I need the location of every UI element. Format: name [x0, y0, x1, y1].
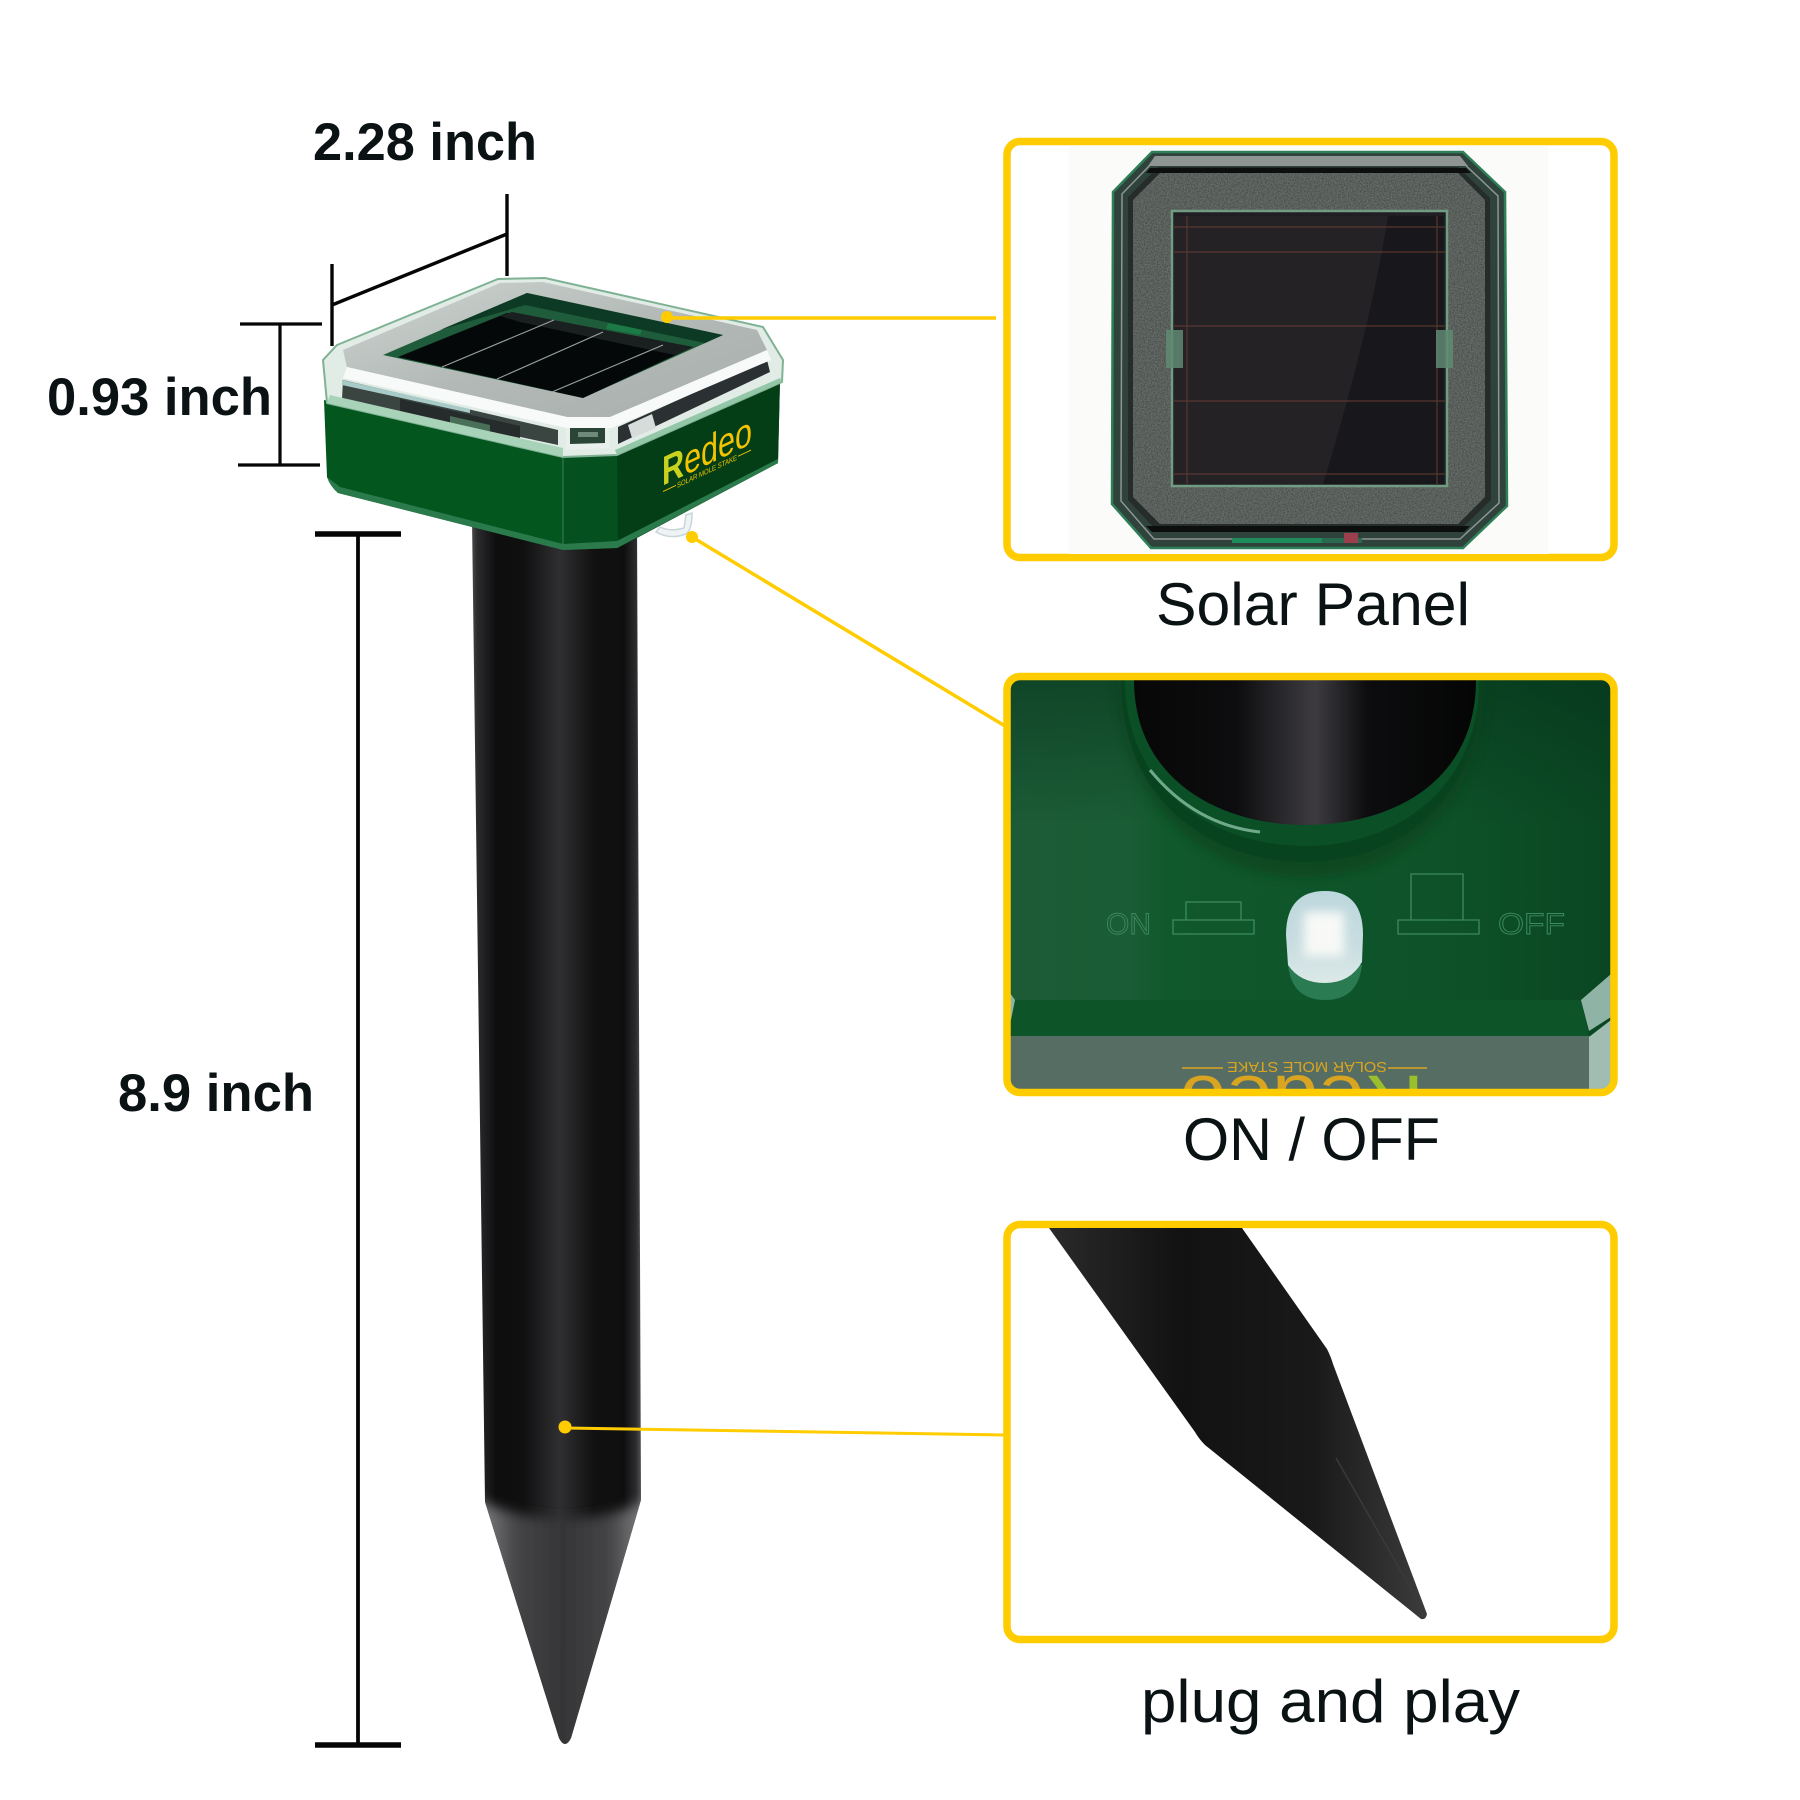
stake tip close-up	[1049, 1228, 1427, 1619]
right glass side	[618, 360, 770, 444]
front glass side	[342, 380, 558, 445]
solar panel photo	[1112, 152, 1507, 548]
shelf	[1010, 1000, 1589, 1036]
dimension: height 0.93 inch	[47, 324, 322, 465]
panel: solar panel	[1007, 142, 1614, 558]
logo: SOLAR MOLE STAKE	[677, 453, 737, 490]
logo	[662, 408, 752, 497]
dimension: length 8.9 inch: 8.9 inch	[118, 1064, 314, 1123]
dimension: length 8.9 inch	[118, 534, 401, 1745]
embossed on label: ON	[1106, 908, 1151, 941]
upside-down logo: SOLAR MOLE STAKE	[1227, 1058, 1387, 1075]
clear cover	[323, 278, 783, 457]
foam surround	[1133, 173, 1485, 524]
switch nub under head	[656, 513, 692, 537]
caption: plug and play: plug and play	[1141, 1668, 1520, 1735]
upside-down logo	[1182, 1062, 1427, 1089]
embossed off label: OFF	[1498, 908, 1565, 941]
top face	[343, 282, 767, 417]
upside-down logo: Redeo	[1180, 1060, 1424, 1140]
stake collar	[1118, 680, 1484, 878]
panel: plug and play	[1007, 1224, 1614, 1640]
stake body	[472, 527, 641, 1744]
green base	[1010, 680, 1610, 1036]
corner highlights	[1581, 974, 1611, 1031]
embossed off label	[1398, 874, 1565, 941]
stake cone tip	[485, 1494, 641, 1744]
leader: stake	[558, 1420, 1005, 1435]
solar panel	[398, 312, 693, 398]
product head	[323, 278, 783, 550]
embossed on label	[1107, 901, 1255, 935]
caption: solar panel: Solar Panel	[1156, 571, 1470, 638]
leader: on off switch	[686, 531, 1005, 726]
logo: Redeo	[662, 408, 752, 495]
solar recess	[383, 293, 723, 398]
leader: solar panel	[661, 311, 996, 323]
dimension: height 0.93 inch: 0.93 inch	[47, 368, 272, 427]
grey base	[1010, 1036, 1611, 1089]
panel: on off	[1007, 676, 1614, 1140]
caption: on off: ON / OFF	[1183, 1106, 1440, 1173]
dimension: width 2.28 inch	[313, 113, 537, 346]
dimension: width 2.28 inch: 2.28 inch	[313, 113, 537, 172]
green base	[324, 380, 780, 550]
switch button	[1286, 891, 1363, 1000]
corner post	[566, 418, 610, 450]
